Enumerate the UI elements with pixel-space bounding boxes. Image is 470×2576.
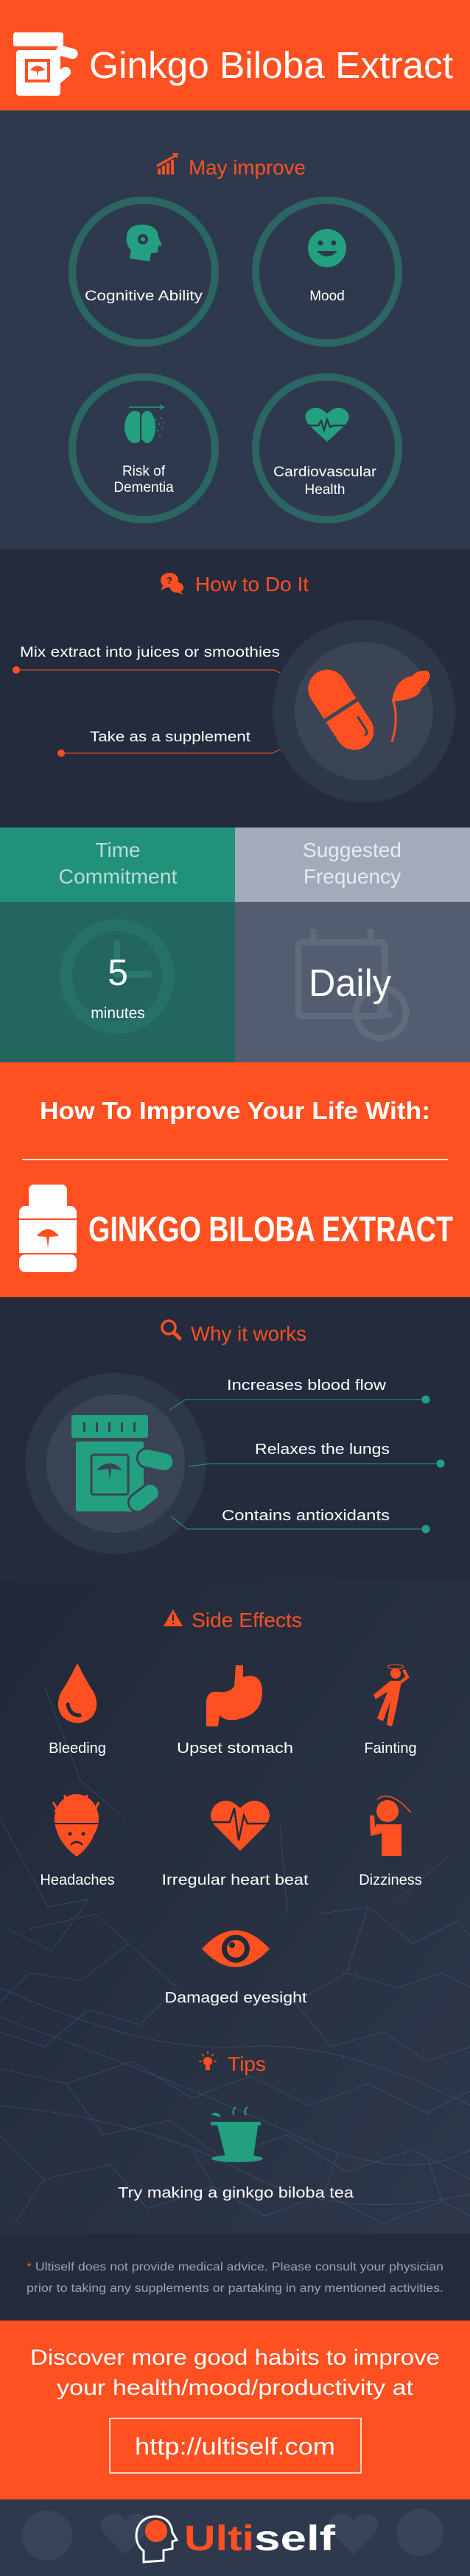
url box: http://ultiself.com [135, 2433, 335, 2460]
icon: damaged eyesight: Damaged eyesight [165, 1990, 307, 2006]
item: risk of dementia: Dementia [113, 480, 174, 495]
list item: lungs [189, 1441, 445, 1468]
list item: antioxidants [171, 1508, 430, 1533]
item: cognitive ability: Cognitive Ability [85, 289, 203, 304]
panel: how to improve banner [0, 1062, 470, 1297]
panel: suggested frequency [235, 828, 470, 1062]
panel: why it works [0, 1297, 470, 1581]
icon: damaged eyesight [165, 1930, 307, 2006]
icon: bottle with pills [13, 32, 79, 96]
text: tip: Try making a ginkgo biloba tea [118, 2185, 354, 2201]
icon: fainting [364, 1665, 417, 1757]
icon: fainting: Fainting [364, 1740, 417, 1757]
panel: time commitment: Commitment [59, 865, 178, 888]
panel: time commitment: minutes [91, 1005, 145, 1022]
call to action [0, 2321, 470, 2499]
panel: how to do it [0, 549, 470, 828]
icon: upset stomach: Upset stomach [177, 1740, 293, 1757]
heading: how to do it: ? [166, 575, 172, 586]
heading: may improve [156, 153, 306, 179]
item: cardiovascular health: Health [305, 482, 345, 498]
panel: time commitment [0, 828, 235, 1062]
list item: blood flow: Increases blood flow [227, 1377, 387, 1394]
callout: supplement [57, 730, 295, 757]
disclaimer: prior to taking any supplements or partaking in any mentioned activities. [27, 2282, 443, 2295]
panel: time commitment: Time [95, 839, 141, 861]
item: cognitive ability [72, 200, 215, 343]
call to action: Discover more good habits to improve [30, 2346, 440, 2370]
panel: may improve [0, 110, 470, 549]
list item: blood flow [169, 1377, 430, 1410]
panel: side effects and tips [0, 1581, 470, 2234]
item: mood [256, 200, 399, 343]
logo [136, 2516, 336, 2562]
list item: antioxidants: Contains antioxidants [222, 1508, 390, 1524]
title: Ginkgo Biloba Extract [89, 44, 453, 86]
icon: calendar [298, 929, 406, 1038]
header [0, 0, 470, 110]
item: cardiovascular health [256, 377, 399, 520]
icon: bleeding: Bleeding [49, 1740, 106, 1757]
item: cardiovascular health: Cardiovascular [273, 465, 377, 480]
icon: supplement bottle [25, 1373, 206, 1554]
heading: how to do it: How to Do It [195, 573, 309, 596]
icon: upset stomach [177, 1665, 293, 1757]
callout: mix extract [13, 645, 293, 680]
icon: clock [60, 919, 175, 1034]
panel: suggested frequency: Suggested [303, 839, 401, 861]
icon: irregular heart beat [162, 1801, 309, 1888]
panel: time commitment: 5 [108, 952, 128, 993]
panel: suggested frequency: Daily [309, 962, 391, 1005]
icon: pill and ginkgo leaf [273, 620, 455, 802]
icon: irregular heart beat: Irregular heart beat [162, 1872, 309, 1888]
logo: self [254, 2519, 336, 2558]
list item: lungs: Relaxes the lungs [255, 1441, 390, 1458]
icon: bottle [19, 1185, 77, 1272]
heading: why it works: Why it works [191, 1322, 306, 1345]
icon: dizziness: Dizziness [359, 1872, 422, 1888]
panel: how to improve banner: How To Improve Your Life With: [40, 1097, 430, 1124]
callout: mix extract: Mix extract into juices or smoothies [20, 645, 280, 660]
heading: may improve: May improve [189, 156, 306, 179]
icon: tea cup [211, 2107, 263, 2162]
url box [110, 2418, 361, 2473]
item: mood: Mood [309, 289, 345, 304]
logo: Ulti [184, 2519, 254, 2558]
heading: tips: Tips [228, 2053, 266, 2075]
icon: headaches: Headaches [40, 1872, 115, 1888]
callout: supplement: Take as a supplement [90, 730, 251, 745]
heading: side effects: Side Effects [192, 1609, 302, 1631]
heading: tips [199, 2051, 266, 2075]
icon: dizziness [359, 1796, 422, 1888]
call to action: your health/mood/productivity at [57, 2376, 414, 2400]
footer [0, 2499, 470, 2576]
item: risk of dementia [72, 377, 215, 520]
icon: bleeding [49, 1663, 106, 1757]
item: risk of dementia: Risk of [122, 464, 166, 479]
icon: headaches [40, 1794, 115, 1888]
disclaimer [0, 2234, 470, 2321]
panel: suggested frequency: Frequency [304, 865, 401, 888]
disclaimer: * Ultiself does not provide medical advice. Please consult your physician [27, 2261, 443, 2273]
